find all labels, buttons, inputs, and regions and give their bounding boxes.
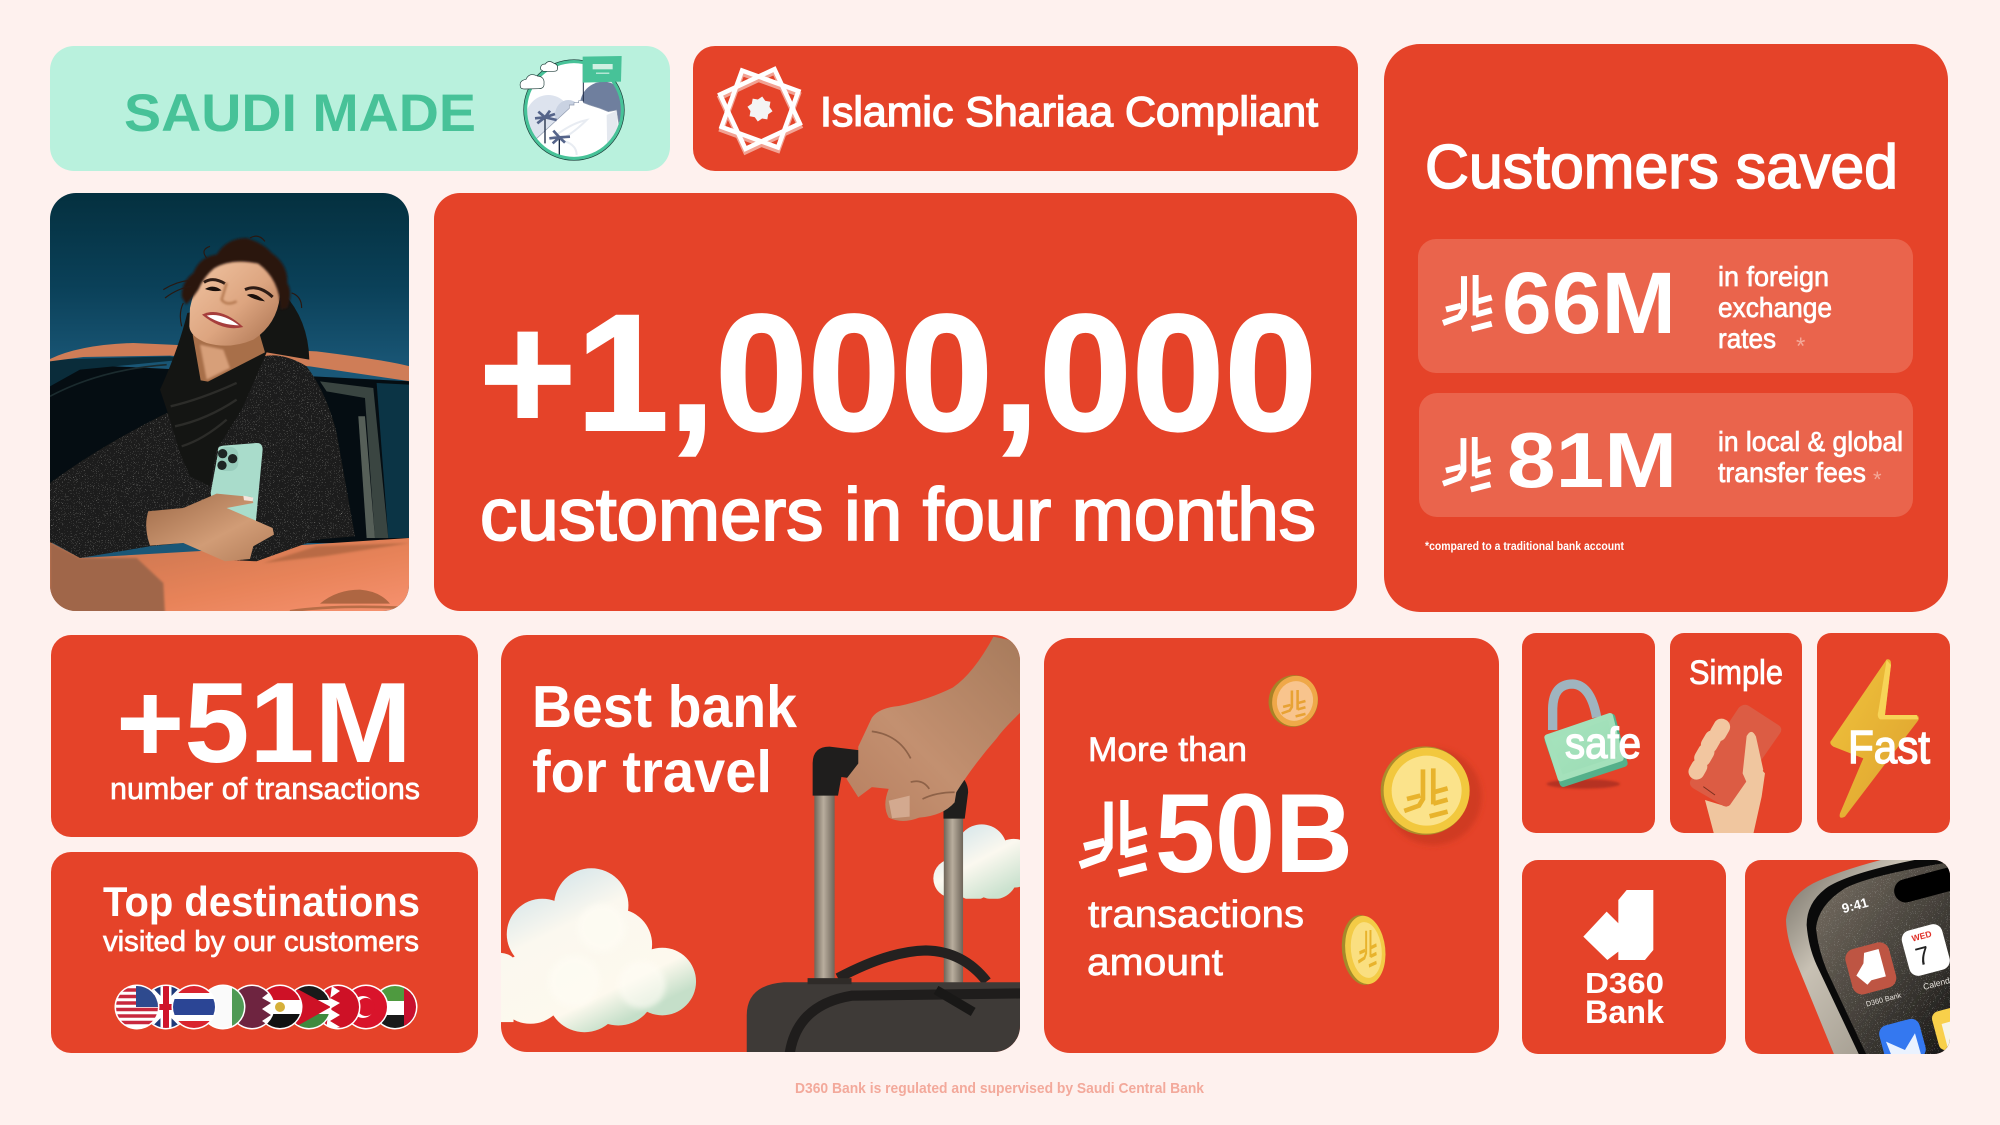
heading: best bank for travel: for travel [532, 739, 772, 805]
icon: lightning bolt [1830, 659, 1919, 818]
subheading: visited by our customers [103, 926, 419, 958]
heading: Saudi Made: SAUDI MADE [124, 84, 476, 143]
icon: hand holding phone [1686, 705, 1781, 834]
value: 81M: 81M [1507, 416, 1677, 504]
panel: safe [1522, 633, 1655, 833]
panel: simple [1670, 633, 1802, 834]
illustration: phone: 9:41 [1840, 895, 1870, 916]
illustration: phone: D360 Bank [1865, 990, 1902, 1009]
label: fast: Fast [1848, 721, 1930, 773]
flags row [114, 984, 420, 1031]
heading: Customers saved: Customers saved [1425, 133, 1898, 202]
label: simple: Simple [1689, 654, 1783, 692]
icon: padlock [1547, 684, 1624, 789]
icon: large coin [1381, 746, 1482, 845]
icon: tilted coin [1338, 913, 1389, 987]
icon: geometric star [720, 69, 800, 152]
icon: riyal sign [1080, 800, 1146, 873]
footnote: *compared to a traditional bank account [1425, 541, 1624, 553]
panel: one million customers [434, 193, 1357, 611]
label: transactions amount: amount [1087, 942, 1223, 984]
heading: top destinations: Top destinations [103, 878, 420, 925]
label: transactions amount: transactions [1088, 894, 1304, 936]
heading: Islamic Shariaa Compliant: Islamic Shariaa Compliant [820, 88, 1318, 135]
illustration: phone: Calendar [1922, 973, 1959, 992]
panel: D360 Bank logo [1522, 860, 1726, 1054]
panel: best bank for travel [480, 635, 1038, 1059]
value: 50B: 50B [1155, 771, 1353, 896]
panel: 50B transactions [1044, 638, 1499, 1053]
heading: best bank for travel [532, 674, 797, 805]
label: transactions amount [1087, 894, 1304, 984]
label: local and global transfer fees: * [1873, 467, 1882, 492]
label: D360 Bank: Bank [1585, 994, 1664, 1030]
value: +1,000,000: +1,000,000 [479, 281, 1317, 466]
label: customers in four months: customers in four months [480, 473, 1316, 556]
label: safe: safe [1565, 719, 1641, 768]
icon: small coin [1263, 669, 1324, 732]
panel: phone home screen [1745, 860, 1950, 1054]
label: foreign exchange rates: rates [1718, 323, 1776, 354]
panel: number of transactions [51, 635, 478, 837]
label: number of transactions: number of transactions [110, 771, 420, 806]
label: more than: More than [1088, 731, 1247, 769]
stat: 66M foreign exchange [1418, 239, 1913, 373]
illustration: phone [1786, 860, 1950, 1054]
label: D360 Bank: D360 [1585, 968, 1664, 1000]
label: foreign exchange rates: exchange [1718, 292, 1832, 323]
icon: riyal sign [1443, 275, 1492, 329]
panel: Customers saved [1384, 44, 1948, 612]
label: foreign exchange rates: in foreign [1718, 261, 1829, 292]
illustration: clouds, suitcase and hand [480, 637, 1038, 1059]
label: local and global transfer fees: in local & global [1718, 426, 1903, 457]
stat: 81M transfer fees [1419, 393, 1913, 517]
footer: regulatory note: D360 Bank is regulated and supervised by Saudi Central Bank [795, 1080, 1205, 1097]
illustration: phone: 7 [1913, 941, 1933, 972]
photo: woman with phone leaning from car [50, 193, 410, 613]
label: foreign exchange rates: * [1796, 333, 1805, 360]
heading: best bank for travel: Best bank [532, 674, 797, 740]
icon: D360 logo [1583, 890, 1653, 960]
panel: Islamic Shariaa Compliant [693, 46, 1358, 171]
label: local and global transfer fees: transfer fees [1718, 457, 1866, 488]
label: local and global transfer fees [1718, 426, 1903, 492]
label: D360 Bank [1585, 968, 1664, 1030]
icon: riyal sign [1443, 437, 1490, 490]
panel: Saudi Made [50, 46, 670, 171]
illustration: phone: WED [1911, 929, 1933, 944]
label: foreign exchange rates [1718, 261, 1832, 360]
value: +51M: +51M [116, 660, 412, 787]
panel: top destinations [51, 852, 478, 1053]
icon: Saudi landscape badge [520, 56, 627, 163]
value: 66M: 66M [1502, 255, 1676, 352]
panel: fast [1817, 633, 1950, 833]
